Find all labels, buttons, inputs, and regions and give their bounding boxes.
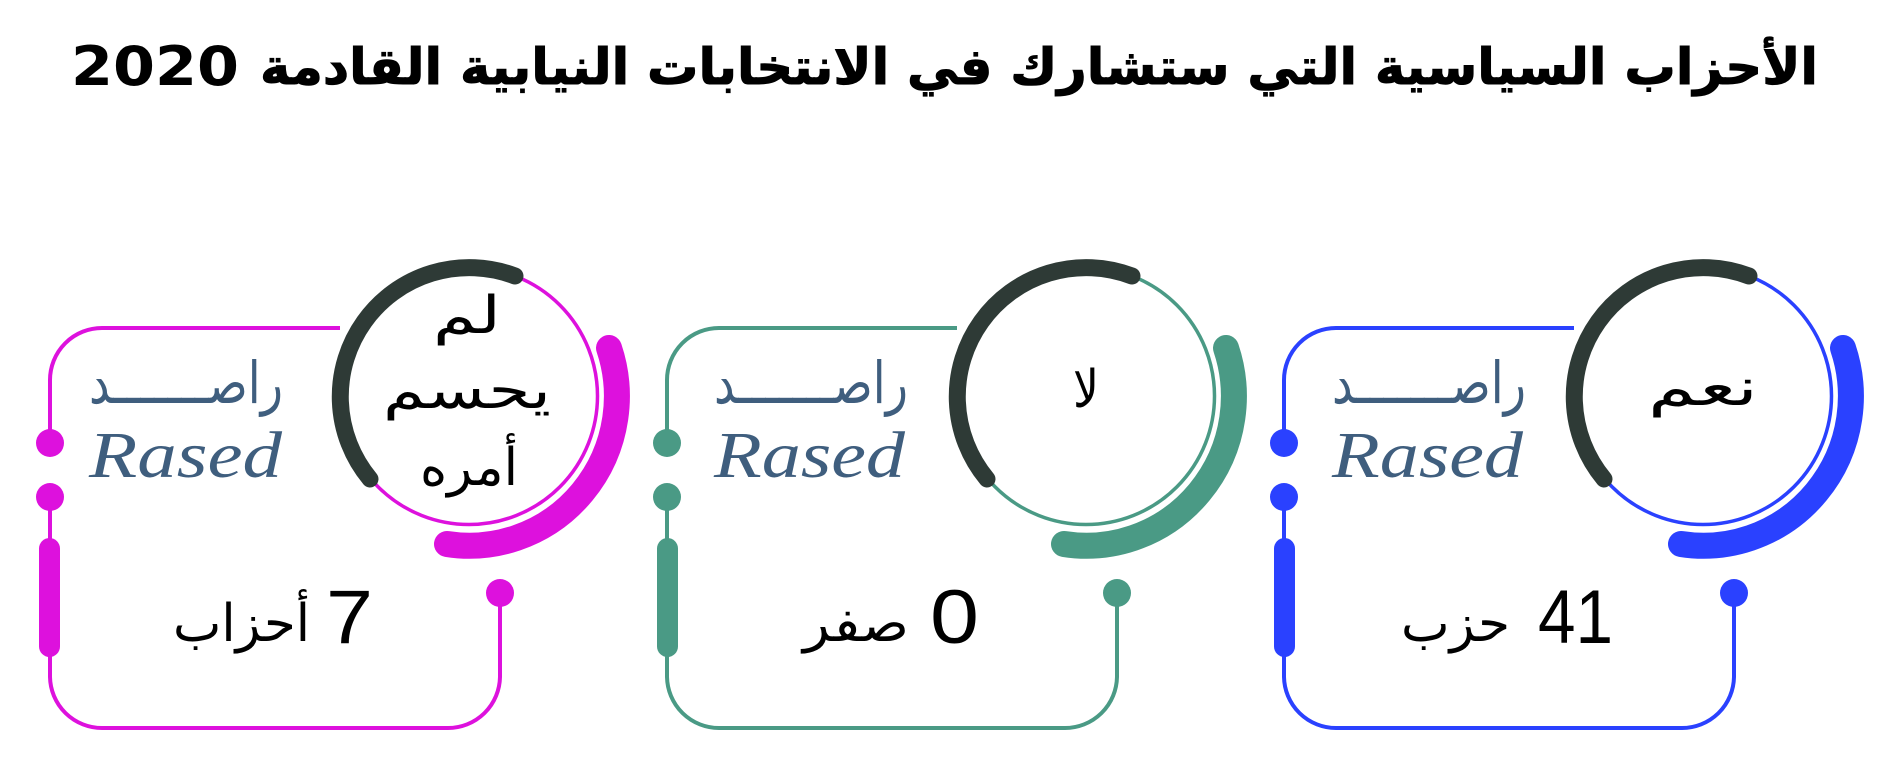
connector frame: [50, 328, 500, 728]
brand latin: Rased: [1331, 419, 1524, 492]
thin circle: [1574, 268, 1832, 524]
thick outer arc: [1681, 348, 1851, 546]
answer label: يحسم: [383, 361, 551, 421]
connector dots and pill: [653, 429, 1131, 657]
count unit: أحزاب: [173, 589, 310, 654]
count number: 7: [326, 575, 373, 660]
count number: 0: [930, 575, 979, 660]
answer label: لا: [1073, 360, 1099, 420]
panel: yes (blue): [1270, 268, 1851, 728]
panel: no (green): [653, 268, 1234, 728]
title: الأحزاب السياسية التي ستشارك في الانتخابات النيابية القادمة: [260, 36, 1818, 97]
thick outer arc: [447, 348, 617, 546]
answer label: لم: [433, 286, 501, 346]
thin circle: [340, 268, 598, 524]
panel: undecided (magenta): [36, 268, 617, 728]
dark arc: [1574, 268, 1749, 479]
answer label: [383, 286, 551, 498]
answer label: نعم: [1648, 358, 1758, 418]
connector dots and pill: [36, 429, 514, 657]
dark arc: [340, 268, 515, 479]
answer label: أمره: [420, 433, 518, 498]
title: 2020: [71, 35, 239, 98]
count unit: صفر: [800, 594, 909, 654]
connector dots and pill: [1270, 429, 1748, 657]
brand arabic: راصـــــــد: [714, 349, 908, 417]
thin circle: [958, 268, 1214, 524]
connector frame: [667, 328, 1117, 728]
brand latin: Rased: [713, 419, 906, 492]
count unit: حزب: [1401, 594, 1510, 654]
count number: 41: [1538, 575, 1613, 660]
brand latin: Rased: [88, 419, 283, 492]
connector frame: [1284, 328, 1734, 728]
brand arabic: راصـــــــد: [1332, 349, 1526, 417]
dark arc: [957, 268, 1132, 479]
thick outer arc: [1064, 348, 1234, 546]
brand arabic: راصـــــــد: [89, 349, 283, 417]
